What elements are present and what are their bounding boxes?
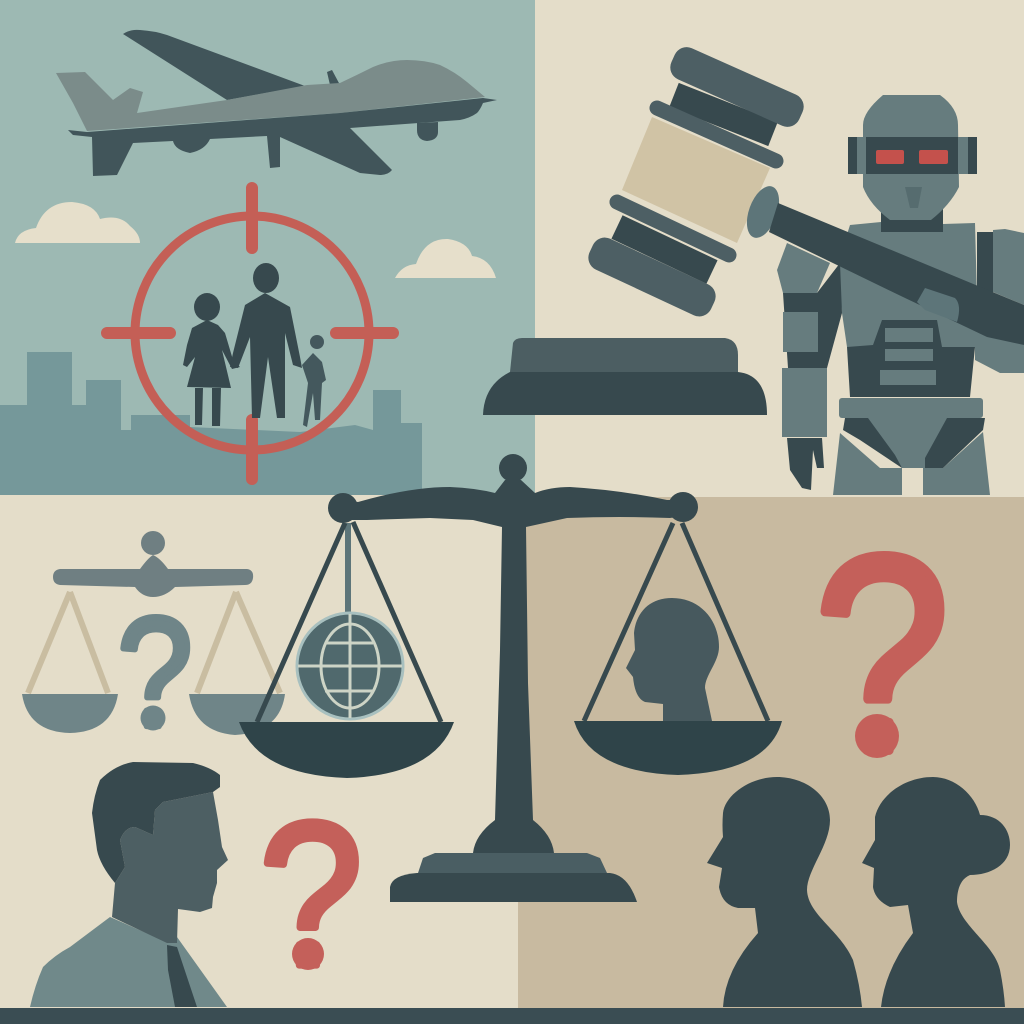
icon: person silhouette right with bun: [862, 777, 1010, 1007]
panel: city skyline: [0, 352, 422, 495]
icon: target crosshair: [107, 188, 393, 479]
icon: main balance scale: [239, 454, 782, 902]
icon: question mark right: ?: [815, 499, 949, 810]
icon: globe: [297, 613, 403, 719]
icon: gavel: [584, 43, 808, 321]
icon: gavel sound block: [483, 338, 767, 415]
icon: family silhouettes: [183, 263, 326, 427]
icon: man in shirt: [30, 762, 228, 1007]
icon: small scale: [22, 531, 285, 759]
icon: question mark bottom: ?: [259, 780, 363, 1009]
icon: person silhouette left: [707, 777, 862, 1007]
icon: head silhouette: [626, 598, 719, 721]
icon: cloud right: [395, 239, 496, 278]
icon: cloud left: [15, 202, 140, 243]
icon: small scale: ?: [117, 585, 193, 759]
icon: robot: [769, 95, 1024, 495]
icon: drone: [56, 30, 497, 176]
